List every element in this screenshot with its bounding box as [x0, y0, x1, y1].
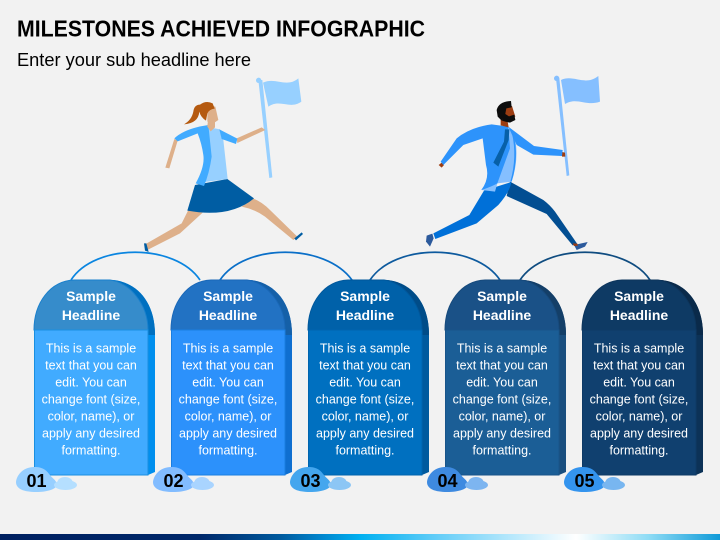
- icon: man running with flag: [426, 76, 600, 250]
- milestone 3 text: formatting.: [335, 444, 395, 458]
- milestone 4 headline: Sample: [477, 288, 527, 304]
- milestone 2 headline: Sample: [203, 288, 253, 304]
- milestone 1 text: [42, 342, 140, 458]
- subtitle: Enter your sub headline here: [17, 50, 251, 70]
- milestone 1 text: This is a sample: [46, 342, 136, 356]
- milestone 3 headline: Sample: [340, 288, 390, 304]
- milestone 3 number badge: 03: [300, 471, 321, 491]
- milestone 1 text: text that you can: [45, 358, 137, 372]
- milestone 5 text: color, name), or: [596, 410, 682, 424]
- panel: milestone 3: [290, 280, 429, 492]
- milestone 3 text: This is a sample: [320, 342, 410, 356]
- milestone 4 headline: Headline: [473, 307, 531, 323]
- milestone 4 text: formatting.: [472, 444, 532, 458]
- milestone 5 text: apply any desired: [590, 426, 688, 440]
- milestone 3 text: text that you can: [319, 358, 411, 372]
- milestone 2 text: This is a sample: [183, 342, 273, 356]
- milestone 4 text: text that you can: [456, 358, 548, 372]
- milestone 3 text: apply any desired: [316, 426, 414, 440]
- milestone 2 text: color, name), or: [185, 410, 271, 424]
- milestone 1 headline: Sample: [66, 288, 116, 304]
- panel: milestone 2: [153, 280, 292, 492]
- milestone 4 text: change font (size,: [453, 392, 551, 406]
- milestone 2 text: apply any desired: [179, 426, 277, 440]
- milestone 1 text: color, name), or: [48, 410, 134, 424]
- milestone 5 number badge: 05: [574, 471, 595, 491]
- milestone 3 text: [316, 342, 414, 458]
- milestone 1 text: formatting.: [61, 444, 121, 458]
- milestone 3 headline: [336, 288, 394, 323]
- milestone 3 number badge: [290, 467, 351, 492]
- milestone 2 text: formatting.: [198, 444, 258, 458]
- milestone 5 text: edit. You can: [603, 376, 675, 390]
- milestone 5 text: change font (size,: [590, 392, 688, 406]
- milestone 3 text: color, name), or: [322, 410, 408, 424]
- milestone 5 number badge: [564, 467, 625, 492]
- milestone 5 headline: Sample: [614, 288, 664, 304]
- milestone 3 text: edit. You can: [329, 376, 401, 390]
- milestone 1 number badge: [16, 467, 77, 492]
- milestone 1 text: apply any desired: [42, 426, 140, 440]
- milestone 5 text: text that you can: [593, 358, 685, 372]
- milestone 2 number badge: [153, 467, 214, 492]
- milestone 2 headline: [199, 288, 257, 323]
- milestone 5 headline: Headline: [610, 307, 668, 323]
- icon: woman running with flag: [144, 78, 303, 252]
- milestone 1 text: edit. You can: [55, 376, 127, 390]
- panel: milestone 4: [427, 280, 566, 492]
- milestone 5 text: This is a sample: [594, 342, 684, 356]
- milestone 5 headline: [610, 288, 668, 323]
- milestone 2 text: text that you can: [182, 358, 274, 372]
- milestone 4 text: color, name), or: [459, 410, 545, 424]
- milestone 4 headline: [473, 288, 531, 323]
- milestone 5 text: formatting.: [609, 444, 669, 458]
- bottom gradient bar: [0, 534, 720, 540]
- milestone 2 text: change font (size,: [179, 392, 277, 406]
- connecting arcs: [71, 252, 650, 280]
- milestone 2 text: edit. You can: [192, 376, 264, 390]
- milestone 3 headline: Headline: [336, 307, 394, 323]
- panel: milestone 1: [16, 280, 155, 492]
- milestone 4 text: This is a sample: [457, 342, 547, 356]
- milestone 4 number badge: [427, 467, 488, 492]
- milestone 1 text: change font (size,: [42, 392, 140, 406]
- milestone 4 number badge: 04: [437, 471, 458, 491]
- milestone 2 text: [179, 342, 277, 458]
- milestone 1 number badge: 01: [26, 471, 47, 491]
- milestone 2 number badge: 02: [163, 471, 184, 491]
- panel: milestone 5: [564, 280, 703, 492]
- milestone 4 text: [453, 342, 551, 458]
- milestone 3 text: change font (size,: [316, 392, 414, 406]
- milestone 4 text: apply any desired: [453, 426, 551, 440]
- milestone 1 headline: Headline: [62, 307, 120, 323]
- milestone 5 text: [590, 342, 688, 458]
- milestone 1 headline: [62, 288, 120, 323]
- title: MILESTONES ACHIEVED INFOGRAPHIC: [17, 16, 425, 42]
- milestone 4 text: edit. You can: [466, 376, 538, 390]
- milestone 2 headline: Headline: [199, 307, 257, 323]
